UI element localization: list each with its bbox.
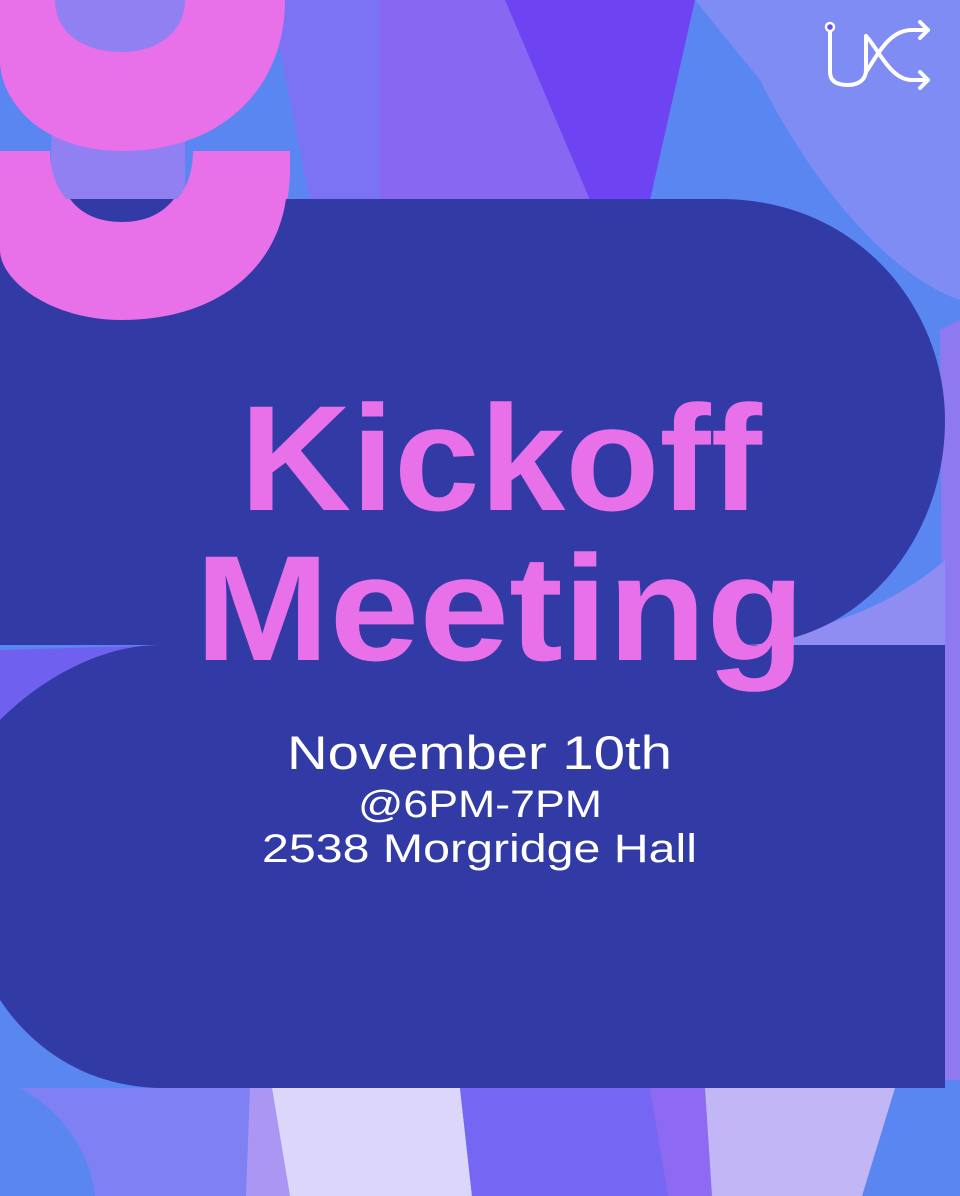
pink g overlap on panel (0, 199, 286, 320)
pink g shape (0, 0, 290, 320)
dark panel lower (0, 645, 945, 1088)
title: Kickoff (240, 374, 763, 542)
title (195, 374, 805, 692)
dark panel upper (0, 199, 945, 645)
event details: November 10th (287, 726, 672, 779)
event details (262, 726, 697, 871)
logo: UX (826, 22, 928, 88)
title: Meeting (195, 524, 805, 692)
event details: 2538 Morgridge Hall (262, 827, 697, 871)
event details: @6PM-7PM (358, 784, 602, 826)
